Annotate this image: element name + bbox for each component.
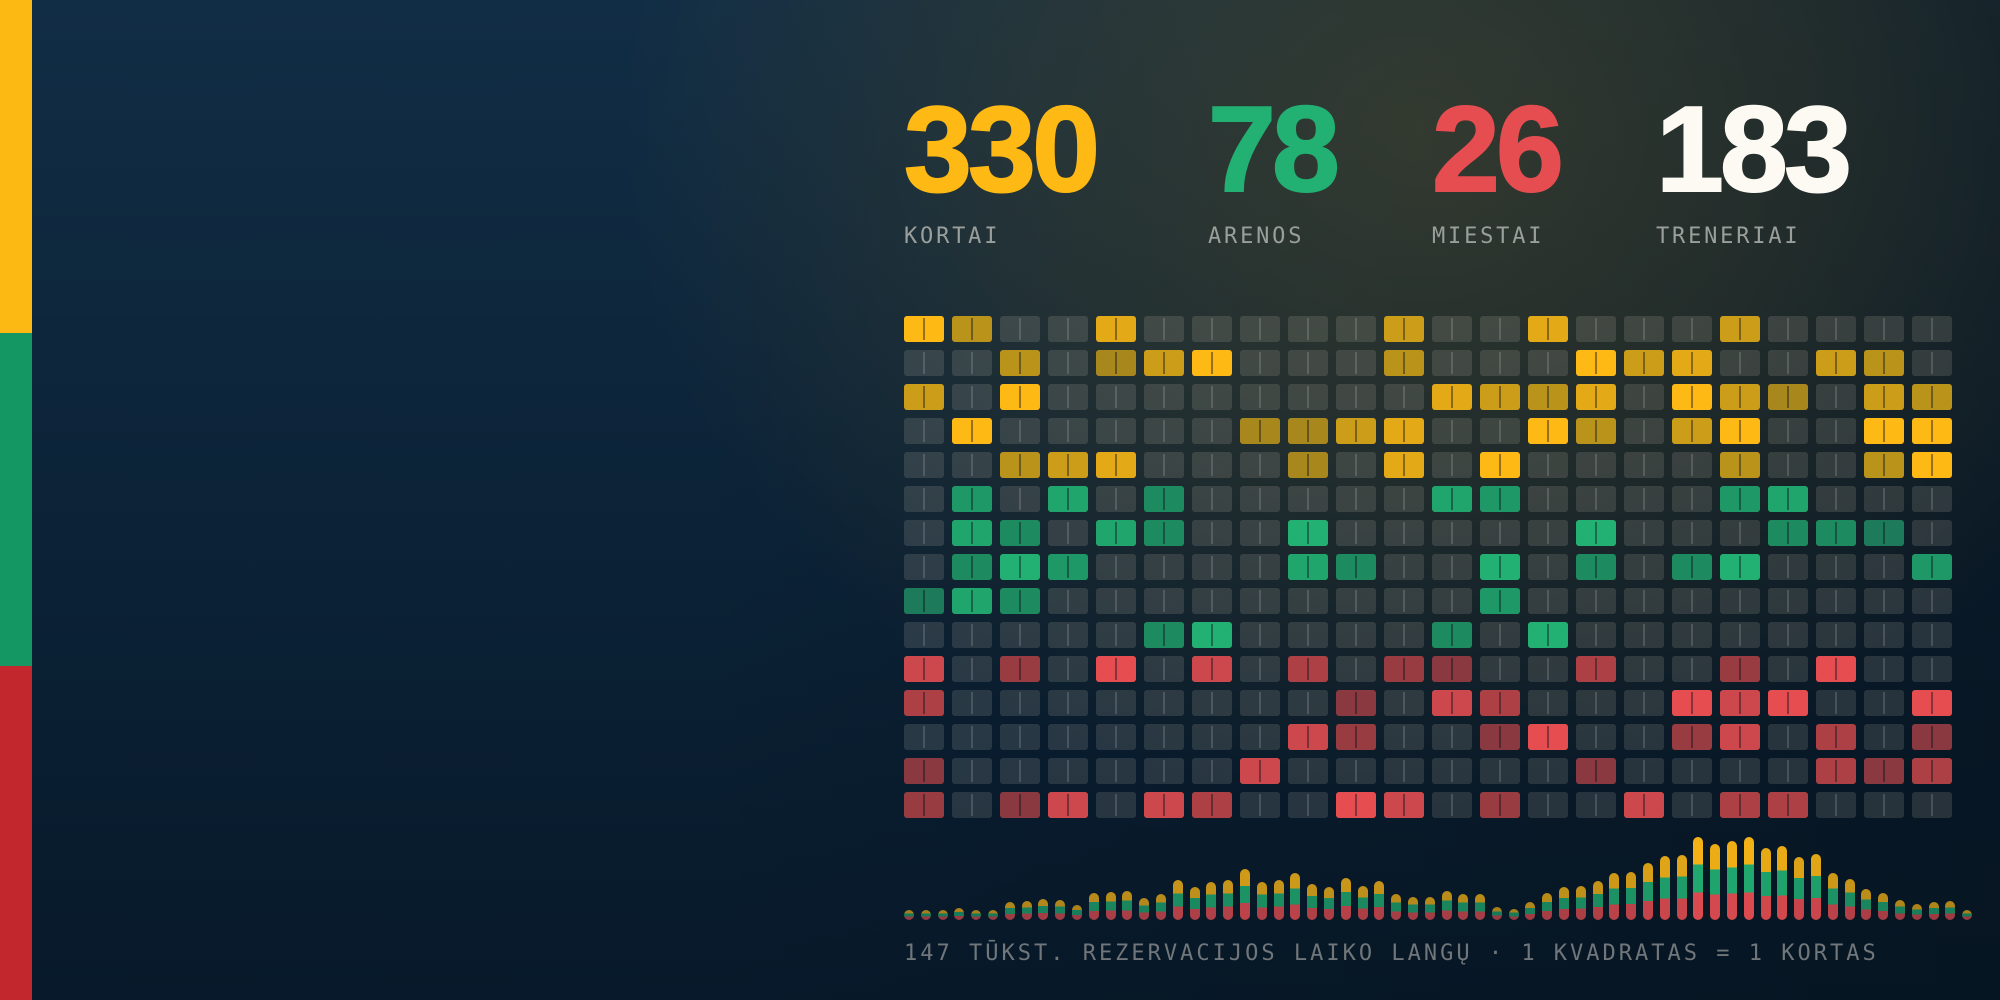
stacked bar chart: bookings over time [904, 837, 1972, 920]
stat label: cities: MIESTAI [1432, 224, 1544, 249]
stat label: courts: KORTAI [904, 224, 1000, 249]
footer caption: 147 TŪKST. REZERVACIJOS LAIKO LANGŲ · 1 KVADRATAS = 1 KORTAS [904, 941, 1879, 966]
stat label: arenas: ARENOS [1208, 224, 1304, 249]
court grid: yellow rows [904, 316, 1952, 478]
flag strip: green [0, 333, 32, 666]
court grid: green rows [904, 486, 1952, 648]
stat label: coaches: TRENERIAI [1656, 224, 1800, 249]
court grid: red rows [904, 656, 1952, 818]
stat number: arenas: 78 [1208, 81, 1336, 217]
flag strip: red [0, 666, 32, 1000]
stat number: courts: 330 [904, 81, 1096, 217]
stat number: coaches: 183 [1656, 81, 1848, 217]
stat number: cities: 26 [1432, 81, 1560, 217]
flag strip: yellow [0, 0, 32, 333]
